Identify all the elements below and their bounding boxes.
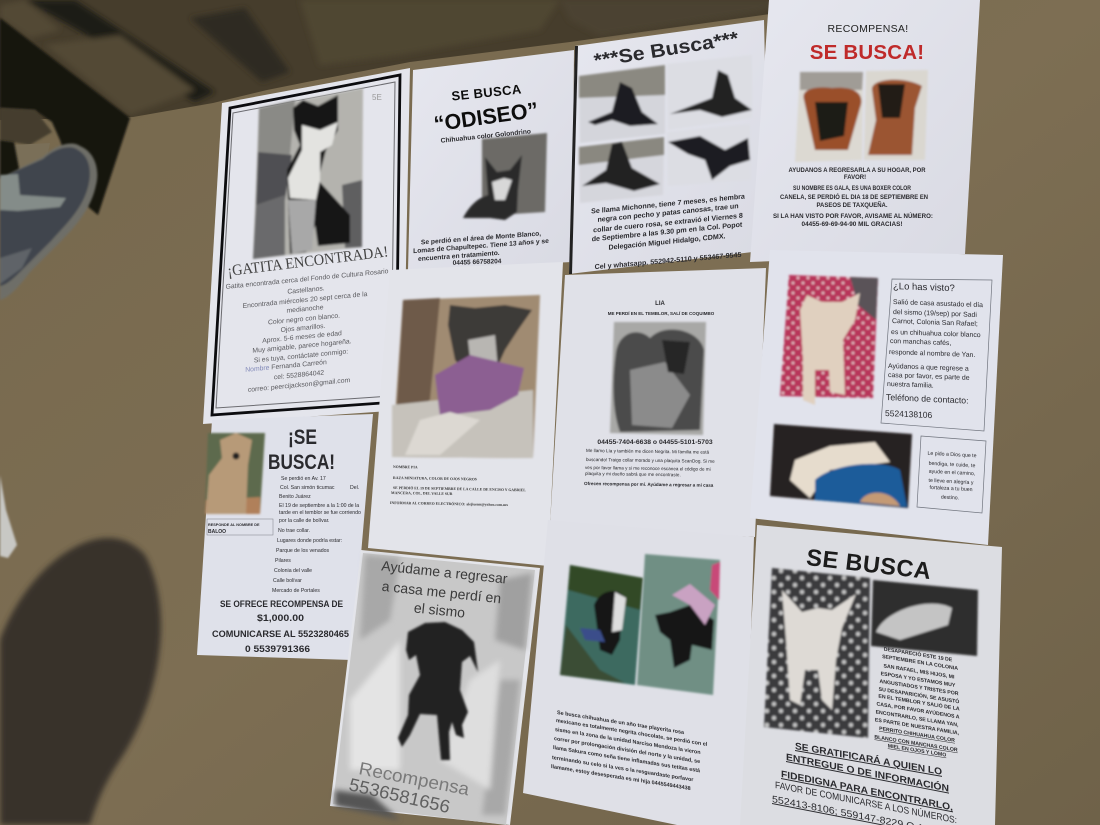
Yan prayer box: bendiga, te cuide, te	[929, 461, 975, 469]
Yan gray text: ESPOSA Y YO ESTAMOS MUY	[881, 671, 956, 689]
Baloo text: Benito Juárez	[279, 494, 311, 500]
Yan text box: Teléfono de contacto:	[886, 392, 969, 406]
Yan gray text: MIEL EN OJOS Y LOMO	[888, 743, 946, 759]
Gala text: 04455-69-69-94-90 MIL GRACIAS!	[802, 222, 903, 228]
cat poster text: Si es tuya, contáctate conmigo:	[254, 348, 348, 365]
background: stone wall at the top	[0, 0, 800, 215]
cat poster text: correo: peercijackson@gmail.com	[248, 377, 350, 394]
Gala text: SU NOMBRE ES GALA, ES UNA BOXER COLOR	[793, 186, 912, 192]
Gala text: RECOMPENSA!	[828, 23, 908, 35]
Lia photo	[610, 322, 706, 435]
poster: gray please help me	[330, 550, 540, 825]
cat poster text: Nombre Fernanda Carreón	[245, 359, 327, 374]
Michonne text: Delegación Miguel Hidalgo, CDMX.	[608, 232, 726, 252]
Yan prayer box: fortaleza a tu buen	[930, 485, 973, 493]
two dog text: mexicano es totalmente negrita chocolate, se perdió con el	[556, 718, 708, 748]
cat poster text: Aprox. 5-6 meses de edad	[262, 330, 342, 345]
Odiseo text: 04455 66758204	[453, 258, 502, 267]
Baloo text: Calle bolívar	[273, 578, 302, 584]
gray poster text: 5536581656	[347, 774, 452, 817]
gray poster text: a casa me perdí en	[381, 578, 502, 606]
Yan text box: nuestra familia.	[887, 381, 934, 390]
schnauzer text: NOMBRE PIA	[393, 465, 418, 469]
Gala text: CANELA, SE PERDIÓ EL DIA 18 DE SEPTIEMBRE EN	[780, 193, 928, 201]
Yan text box: ¿Lo has visto?	[893, 281, 955, 294]
two dog text: sismo en la zona de la unidad Narciso Mendoza la vieron	[555, 727, 701, 756]
Yan gray text: FIDEDIGNA PARA ENCONTRARLO,	[781, 769, 953, 813]
poster: Yan gray	[740, 525, 1002, 825]
schnauzer text	[390, 465, 526, 507]
two dog text: terminando su celo si la ves o la resguardaste porfavor	[552, 755, 694, 784]
Yan prayer box: ayude en el camino,	[929, 469, 975, 477]
Yan gray text: ENTREGUE O DE INFORMACIÓN	[786, 751, 949, 795]
Odiseo text	[413, 81, 549, 267]
Baloo photo	[205, 433, 265, 514]
poster: Gala reward	[750, 0, 980, 262]
Gala text: SE BUSCA!	[810, 41, 924, 64]
black dog	[398, 622, 478, 760]
Odiseo text: Lomas de Chapultepec. Tiene 13 años y se	[413, 238, 549, 255]
gray poster text: Recompensa	[357, 758, 472, 799]
Yan text box: 5524138106	[885, 408, 933, 420]
Yan text box: responde al nombre de Yan.	[889, 349, 975, 359]
Yan text box: Ayúdanos a que regrese a	[888, 363, 969, 373]
Yan gray text: SE BUSCA	[805, 544, 933, 584]
gray poster text	[347, 557, 509, 817]
Odiseo text: Se perdió en el área de Monte Blanco,	[421, 230, 541, 247]
Baloo text: No trae collar.	[278, 528, 310, 534]
Yan gray text: ANGUSTIADOS Y TRISTES POR	[879, 679, 959, 697]
Baloo text: Lugares donde podría estar:	[277, 538, 342, 544]
Baloo text: ¡SE	[288, 426, 317, 449]
cat photo	[253, 88, 363, 259]
Yan text box: casa por favor, es parte de	[888, 372, 970, 382]
Baloo text: Colonia del valle	[274, 568, 312, 574]
Odiseo text: “ODISEO”	[432, 98, 540, 136]
Baloo text: BALOO	[208, 529, 226, 535]
Yan prayer box: Le pido a Dios que te	[928, 451, 977, 459]
Baloo text: RESPONDE AL NOMBRE DE	[208, 523, 260, 527]
icon: sneaker at the left edge	[0, 143, 97, 300]
Lia text: plaquita y mi dueño sabrá que me encontraste.	[585, 471, 681, 477]
Odiseo text: SE BUSCA	[451, 81, 523, 104]
Odiseo text: Chihuahua color Golondrino	[440, 128, 531, 145]
Michonne text: Cel y whatsapp. 552942-5110 y 553467-9545	[595, 251, 741, 271]
Michonne text: ***Se Busca***	[592, 28, 741, 72]
Yan gray text: CASA, POR FAVOR AYÚDENOS A	[877, 700, 960, 721]
poster: Michonne	[569, 20, 769, 274]
Yan text box	[881, 279, 992, 431]
Baloo text: $1,000.00	[257, 613, 304, 624]
Gala text	[773, 23, 933, 228]
cat poster text: Gatita encontrada cerca del Fondo de Cultura Rosario	[226, 268, 389, 291]
Lia text: LIA	[655, 301, 665, 307]
poster: Yan, have you seen him	[750, 250, 1003, 545]
cat poster text: Color negro con blanco.	[268, 313, 340, 326]
Yan prayer box	[917, 436, 986, 513]
Michonne photos	[579, 55, 752, 203]
Yan gray text: ES PARTE DE NUESTRA FAMILIA,	[875, 717, 960, 737]
two dog text	[551, 710, 708, 792]
Baloo text: Pilares	[275, 558, 291, 564]
two dog text: llamame, estoy desesperada es mi hija 0445549443438	[551, 764, 691, 792]
Baloo text: 0 5539791366	[245, 644, 310, 655]
Yan gray text: DESAPARECIÓ ESTE 19 DE	[884, 645, 953, 663]
poster: Baloo	[197, 414, 373, 660]
cat poster text: Castellanos.	[287, 285, 325, 296]
Yan gray text: ENCONTRARLO, SE LLAMA YAN,	[876, 709, 959, 729]
Baloo text: COMUNICARSE AL 5523280465	[212, 629, 350, 640]
cat poster text: ¡GATITA ENCONTRADA!	[226, 243, 389, 280]
Lia text: ves por favor llama y si me reconoce escanea el código de mi	[585, 465, 711, 472]
right dog photo	[637, 554, 720, 695]
cat poster text: Muy amigable, parece hogareña.	[252, 338, 352, 355]
Yan gray text	[772, 544, 962, 825]
schnauzer text: SE PERDIÓ EL 19 DE SEPTIEMBRE DE LA CALLE DE ENCISO Y GABRIEL	[393, 485, 526, 492]
Lia text: ME PERDÍ EN EL TEMBLOR, SALÍ DE COQUIMBO	[608, 309, 715, 316]
Gala photos	[795, 70, 928, 162]
dark second photo	[871, 580, 978, 656]
Yan gray text: SE GRATIFICARÁ A QUIEN LO	[795, 741, 943, 778]
Michonne text: de Septiembre a las 9.30 pm en la Col. Popot	[592, 221, 743, 243]
schnauzer text: RAZA MINIATURA, COLOR DE OJOS NEGROS	[393, 476, 477, 481]
Yan text box: del sismo (19/sep) por Sadi	[893, 309, 977, 319]
Baloo text	[207, 426, 361, 655]
Gala text: AYUDANOS A REGRESARLA A SU HOGAR, POR	[788, 168, 926, 174]
cat poster text: medianoche	[287, 304, 324, 315]
gray poster text: Ayúdame a regresar	[381, 557, 509, 587]
cat poster text: Encontrada miércoles 20 sept cerca de la	[243, 291, 368, 310]
Yan gray text: BLANCO CON MANCHAS COLOR	[874, 734, 958, 754]
Yan text box: con manchas cafés,	[890, 338, 951, 347]
icon: white scrap at left edge	[0, 475, 17, 558]
handwritten note: 5E	[372, 93, 382, 102]
cat poster text: Ojos amarillos.	[281, 323, 326, 334]
Yan text box: Salió de casa asustado el día	[893, 299, 983, 309]
Baloo text: Mercado de Portales	[272, 588, 320, 594]
poster: Odiseo	[408, 50, 574, 270]
Baloo text: BUSCA!	[268, 451, 335, 474]
Yan gray text: SEPTIEMBRE EN LA COLONIA	[882, 654, 958, 672]
Baloo text: tarde en el temblor se fue corriendo	[279, 510, 361, 516]
Lia text: 04455-7404-6638 o 04455-5101-5703	[597, 439, 713, 446]
schnauzer text: MANCERA, COL. DEL VALLE SUR	[391, 491, 453, 496]
poster: cat found	[203, 68, 410, 424]
Yan gray text: SAN RAFAEL, MIS HIJOS, MI	[884, 663, 955, 681]
two dog text: Se busca chihuahua de un año trae playerita rosa	[557, 710, 685, 736]
Yan gray text: EN EL TEMBLOR Y SALIÓ DE LA	[878, 692, 960, 712]
schnauzer photo	[392, 295, 540, 458]
gray poster text: el sismo	[413, 599, 466, 621]
Lia text: Me llamo Lía y también me dicen Negrita. Mi familia me está	[586, 448, 709, 455]
background: shadow at bottom left	[0, 538, 161, 825]
Yan color photo bottom	[770, 424, 912, 508]
Gala text: SI LA HAN VISTO POR FAVOR, AVISAME AL NÚMERO:	[773, 213, 933, 220]
Baloo text: Del.	[350, 485, 359, 491]
Yan text box: Carnot, Colonia San Rafael;	[892, 318, 978, 328]
Yan color photo top	[780, 275, 878, 405]
Gala text: PASEOS DE TAXQUEÑA.	[816, 202, 888, 209]
Michonne text: negra con pecho y patas canosas, trae un	[597, 202, 739, 224]
left dog photo	[560, 565, 643, 685]
Yan text box: es un chihuahua color blanco	[891, 329, 981, 339]
Michonne text: collar de cuero rosa, se extravió el Viernes 8	[593, 212, 743, 234]
two dog text: correr por prolongación división del norte y la unidad, se	[554, 736, 700, 765]
two dog text: llama Sakura como seña tiene inflamadas sus tetitas está	[553, 745, 701, 774]
Baloo text: Parque de los venados	[276, 548, 329, 554]
Lia text: buscando! Traigo collar morado y una plaquita ScanDog. Si me	[586, 457, 715, 464]
poster: Lia	[550, 268, 766, 537]
Baloo text: SE OFRECE RECOMPENSA DE	[220, 599, 343, 610]
Michonne text	[591, 28, 745, 271]
poster: schnauzer in sweater	[368, 262, 563, 566]
Yan gray text: SU DESAPARICIÓN, SE ASUSTÓ	[879, 685, 959, 705]
Gala text: FAVOR!	[844, 175, 866, 181]
Michonne text: Se llama Michonne, tiene 7 meses, es hembra	[591, 192, 745, 216]
Baloo text: Col. San simón ticumac	[280, 485, 335, 491]
Yan prayer box: te lleve en alegría y	[929, 478, 974, 486]
Baloo text: El 19 de septiembre a la 1:00 de la	[279, 503, 359, 509]
Odiseo photo	[463, 133, 547, 220]
Odiseo text: encuentra en tratamiento.	[418, 250, 500, 263]
Yan gray text: PERRITO CHIHUAHUA COLOR	[879, 726, 955, 744]
gray blanket photo	[333, 553, 535, 825]
Lia text	[584, 301, 715, 488]
Baloo text: por la calle de bolívar.	[279, 518, 329, 524]
polka dot dog photo	[764, 568, 870, 738]
schnauzer text: INFORMAR AL CORREO ELECTRÓNICO: alejiusnn@yahoo.com.mx	[390, 500, 508, 507]
poster: two dog photos	[523, 520, 754, 825]
Lia text: Ofrecen recompensa por mí. Ayúdame a regresar a mi casa	[584, 481, 714, 488]
Yan prayer box: destino.	[941, 495, 959, 501]
Baloo text: Se perdió en Av. 17	[281, 476, 326, 482]
cat poster text: cel: 5528864042	[274, 370, 324, 381]
cat poster text	[226, 243, 389, 394]
